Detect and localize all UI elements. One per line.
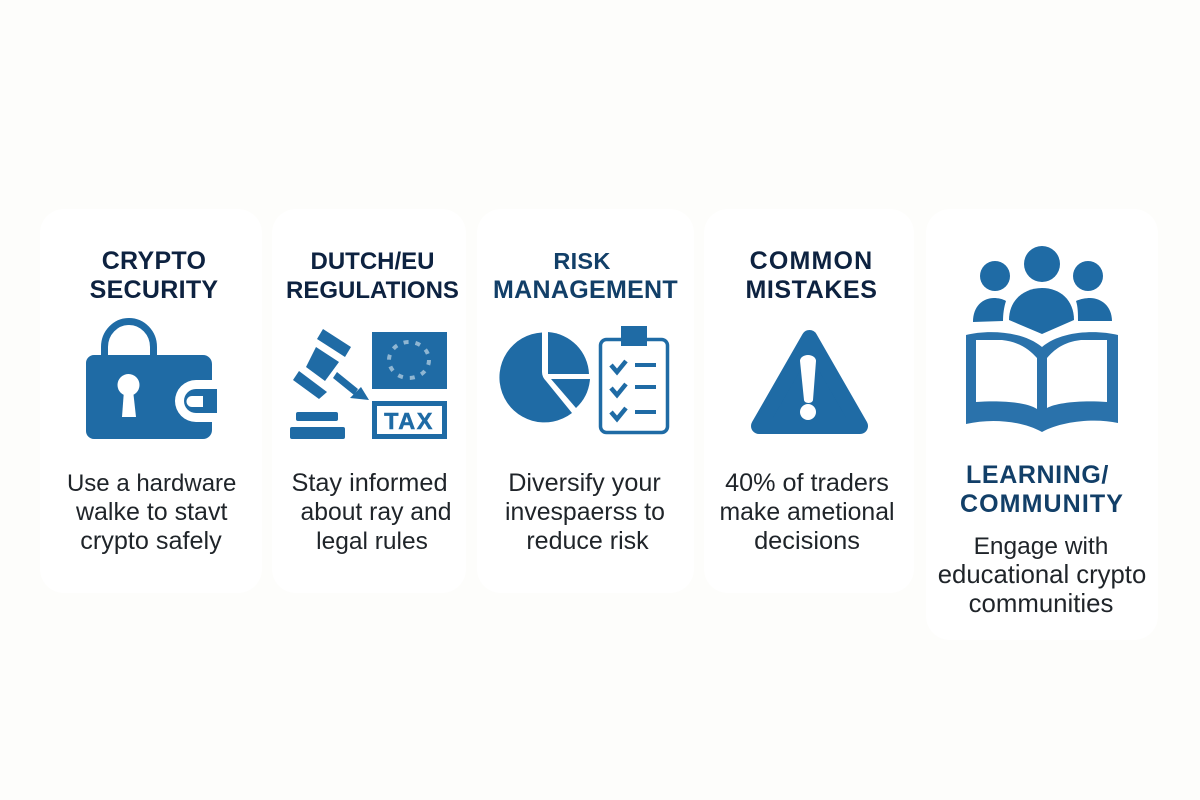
- text: common mistakes: decisions: [754, 527, 860, 555]
- text: risk management: Diversify your: [508, 468, 661, 496]
- heading: common mistakes: COMMON: [750, 246, 873, 274]
- icon: EU flag: [372, 332, 447, 389]
- icon: open book: [966, 332, 1118, 432]
- heading: learning community: [960, 461, 1124, 518]
- panel: regulations: [272, 209, 466, 593]
- panel: risk management: [477, 209, 694, 593]
- heading: common mistakes: [745, 246, 878, 304]
- heading: crypto security: CRYPTO: [102, 246, 206, 274]
- heading: common mistakes: MISTAKES: [745, 276, 878, 304]
- icon: warning triangle: [751, 330, 868, 434]
- text: crypto security: Use a hardware: [67, 470, 236, 496]
- text: crypto security: walke to stavt: [76, 498, 227, 526]
- text: crypto security: crypto safely: [80, 526, 222, 554]
- heading: crypto security: SECURITY: [90, 276, 218, 304]
- text: risk management: [505, 468, 665, 554]
- icon: gavel: [290, 329, 369, 439]
- heading: regulations: [286, 248, 459, 304]
- heading: regulations: REGULATIONS: [286, 276, 459, 304]
- panel: common mistakes: [704, 209, 914, 593]
- text: crypto security: [67, 470, 236, 554]
- text: risk management: reduce risk: [526, 526, 649, 554]
- heading: learning community: COMMUNITY: [960, 490, 1124, 518]
- heading: learning community: LEARNING/: [966, 461, 1109, 489]
- icon: wallet with padlock: [86, 318, 217, 439]
- icon: tax box: [374, 404, 444, 436]
- text: learning community: educational crypto: [938, 561, 1146, 589]
- heading: risk management: MANAGEMENT: [493, 276, 678, 304]
- icon: tax box: TAX: [384, 408, 434, 434]
- text: regulations: about ray and: [300, 498, 451, 526]
- pie chart: [499, 332, 590, 422]
- text: regulations: Stay informed: [291, 468, 448, 496]
- text: regulations: [291, 468, 451, 554]
- icon: people: [973, 246, 1112, 334]
- icon: people and open book: [966, 246, 1118, 432]
- icon: pie chart and checklist: [499, 326, 670, 434]
- clipboard checklist: [600, 326, 668, 432]
- text: common mistakes: make ametional: [719, 499, 895, 526]
- heading: regulations: DUTCH/EU: [310, 248, 434, 274]
- text: learning community: [938, 533, 1146, 618]
- panel: crypto security: [40, 209, 262, 593]
- panel: learning community: [926, 209, 1158, 640]
- icon: gavel flag tax: [290, 329, 447, 439]
- heading: crypto security: [90, 246, 218, 304]
- text: learning community: Engage with: [974, 533, 1108, 560]
- text: common mistakes: 40% of traders: [725, 469, 889, 497]
- heading: risk management: RISK: [553, 248, 611, 274]
- text: risk management: invespaerss to: [505, 498, 665, 526]
- text: regulations: legal rules: [316, 528, 428, 554]
- text: common mistakes: [719, 469, 895, 555]
- text: learning community: communities: [969, 590, 1113, 618]
- heading: risk management: [493, 248, 678, 304]
